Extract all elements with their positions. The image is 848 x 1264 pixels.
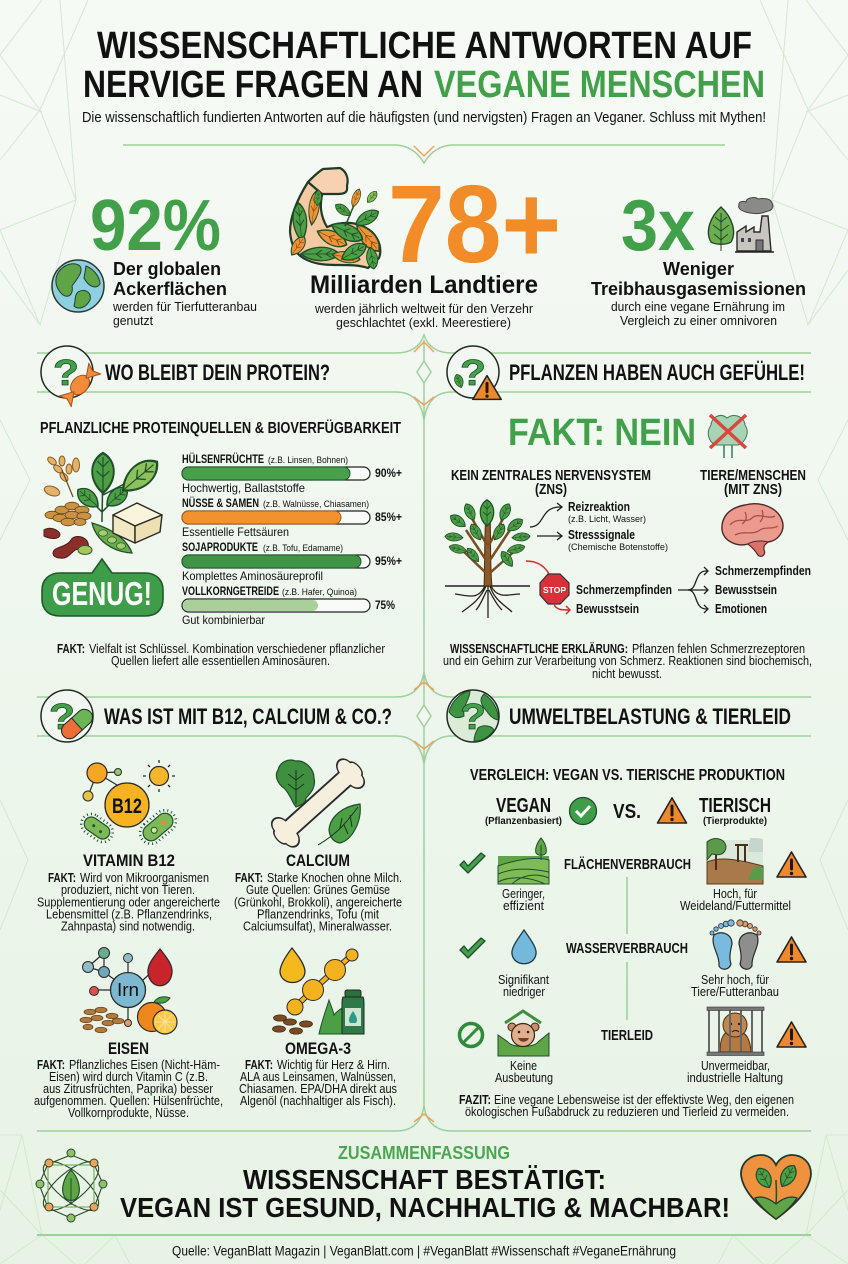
stat: 3x: Vergleich zu einer omnivoren xyxy=(620,313,777,328)
text: fakt protein: FAKT: xyxy=(57,642,85,656)
icon: iron molecule: Irn xyxy=(117,980,139,1000)
headline: VEGAN IST GESUND, NACHHALTIG & MACHBAR! xyxy=(120,1192,730,1223)
comparison header: (Pflanzenbasiert) xyxy=(485,815,562,827)
icon: question mark with candy protein xyxy=(41,346,101,407)
stat: 78+ xyxy=(287,163,561,330)
comparison header: (Tierprodukte) xyxy=(703,815,767,827)
bar: sojaprodukte: 95%+ xyxy=(375,556,402,568)
bar: nuesse und samen: (z.B. Walnüsse, Chiasamen) xyxy=(263,499,369,510)
card: eisen: EISEN xyxy=(108,1039,149,1058)
text: fakt omega: Chiasamen. EPA/DHA direkt aus xyxy=(239,1082,397,1096)
heading: WO BLEIBT DEIN PROTEIN? xyxy=(105,360,330,385)
text: fakt b12: Wird von Mikroorganismen xyxy=(80,871,209,885)
arrows: plant reactions xyxy=(530,503,562,540)
text: fakt eisen: Eisen) wird durch Vitamin C (z.B. xyxy=(49,1070,208,1084)
bar: vollkorngetreide: VOLLKORNGETREIDE xyxy=(182,586,279,598)
icon: no sign xyxy=(460,1024,482,1046)
card: vitamin b12: VITAMIN B12 xyxy=(83,851,175,870)
bar: vollkorngetreide: 75% xyxy=(375,600,395,612)
row: tierleid xyxy=(460,1007,806,1056)
subheading: VERGLEICH: VEGAN VS. TIERISCHE PRODUKTION xyxy=(470,767,785,784)
fakt headline: FAKT: NEIN xyxy=(508,412,696,454)
text: fakt omega: FAKT: xyxy=(245,1058,273,1072)
bar: sojaprodukte: Komplettes Aminosäureprofil xyxy=(182,569,323,583)
card: omega-3 xyxy=(239,948,397,1108)
text: tierleid values: Unvermeidbar, xyxy=(701,1059,770,1073)
text: wissenschaftliche erklaerung: Pflanzen fehlen Schmerzrezeptoren xyxy=(632,642,805,656)
text: brain functions: Emotionen xyxy=(715,602,767,616)
icon: question mark with candy protein: ? xyxy=(53,352,79,393)
panel: zusammenfassung xyxy=(36,1143,811,1223)
text: fakt omega: Wichtig für Herz & Hirn. xyxy=(277,1058,390,1072)
text: fakt b12: Zahnpasta) sind notwendig. xyxy=(61,920,195,934)
text: fakt b12: produziert, nicht von Tieren. xyxy=(61,883,195,897)
text: tierleid values: Keine xyxy=(510,1059,537,1073)
card: eisen xyxy=(34,948,223,1120)
icon: globe with question mark xyxy=(447,690,499,742)
icon: question mark with capsule: ? xyxy=(49,696,75,737)
comparison header: VS. xyxy=(613,801,641,823)
text: fakt b12: Lebensmittel (z.B. Pflanzendrinks, xyxy=(46,908,212,922)
heading: kein zns: KEIN ZENTRALES NERVENSYSTEM xyxy=(451,468,651,484)
text: fakt protein xyxy=(57,642,385,668)
text: wasser values: Tiere/Futteranbau xyxy=(691,985,779,999)
title: NERVIGE FRAGEN AN xyxy=(83,64,423,106)
icon: factory with smoke xyxy=(735,198,774,252)
text: fakt calcium: Starke Knochen ohne Milch. xyxy=(267,871,402,885)
bar: vollkorngetreide xyxy=(182,586,395,627)
title: WISSENSCHAFTLICHE ANTWORTEN AUF xyxy=(97,25,752,67)
title xyxy=(83,25,765,106)
bar: vollkorngetreide: Gut kombinierbar xyxy=(182,613,265,627)
subheading: PFLANZLICHE PROTEINQUELLEN & BIOVERFÜGBARKEIT xyxy=(40,420,401,437)
text: flaechen values: effizient xyxy=(503,899,544,913)
icon: green fields xyxy=(498,838,549,884)
stat: 92%: Der globalen xyxy=(113,258,221,279)
text: plant reactions: Stresssignale xyxy=(568,528,635,542)
headline xyxy=(120,1164,730,1223)
text: wissenschaftliche erklaerung xyxy=(443,641,812,681)
text: fakt calcium: FAKT: xyxy=(235,871,263,885)
text: wasser values xyxy=(498,973,779,999)
row: flaechenverbrauch xyxy=(460,838,806,884)
text: wasser values: niedriger xyxy=(503,985,545,999)
text: flaechen values: Weideland/Futtermittel xyxy=(680,899,791,913)
text: fakt b12: FAKT: xyxy=(48,871,76,885)
callout: genug: GENUG! xyxy=(52,575,152,612)
text: fakt b12: Supplementierung oder angereicherte xyxy=(37,896,220,910)
stat: 92%: werden für Tierfutteranbau xyxy=(112,299,257,314)
text: plant reactions xyxy=(568,500,668,553)
text: wissenschaftliche erklaerung: nicht bewusst. xyxy=(592,667,662,681)
text: fazit: FAZIT: xyxy=(459,1093,491,1107)
card: omega-3: OMEGA-3 xyxy=(285,1039,351,1058)
stat: 78+: 78+ xyxy=(388,163,561,286)
icon: happy bear xyxy=(498,1011,549,1056)
panel: b12 calcium xyxy=(34,690,402,1120)
stat: 92%: Ackerflächen xyxy=(113,278,227,299)
headline: WISSENSCHAFT BESTÄTIGT: xyxy=(243,1164,606,1195)
icon: crossed-out brain xyxy=(708,415,747,458)
icon: bone with leaves xyxy=(266,753,370,853)
text: fazit xyxy=(459,1093,794,1119)
comparison header: TIERISCH xyxy=(699,795,771,817)
text: plant reactions: Reizreaktion xyxy=(568,500,630,514)
text: flaechen values: Geringer, xyxy=(502,887,545,901)
icon: globe xyxy=(52,260,104,312)
icon: science network with leaf xyxy=(36,1149,107,1222)
bar: sojaprodukte: SOJAPRODUKTE xyxy=(182,542,258,554)
panel: pflanzen gefuehle xyxy=(443,346,812,681)
icon: stop sign: STOP xyxy=(543,585,566,595)
bar: huelsenfruechte xyxy=(182,453,402,495)
row: wasserverbrauch xyxy=(460,920,806,969)
text: wasser values: Signifikant xyxy=(498,973,549,987)
text: fakt omega xyxy=(239,1058,397,1108)
text: fakt b12 xyxy=(37,871,220,934)
stat: 78+: geschlachtet (exkl. Meerestiere) xyxy=(336,315,511,330)
row: flaechenverbrauch: FLÄCHENVERBRAUCH xyxy=(564,856,691,873)
stat: 92% xyxy=(52,186,257,328)
icon: question mark with warning xyxy=(447,346,501,399)
row: wasserverbrauch: WASSERVERBRAUCH xyxy=(566,941,688,957)
text: fakt eisen: aufgenommen. Quellen: Hülsenfrüchte, xyxy=(34,1094,223,1108)
heading: tiere menschen: (MIT ZNS) xyxy=(724,482,782,498)
text: fakt omega: Algenöl (nachhaltiger als Fisch). xyxy=(240,1094,396,1108)
card: calcium: CALCIUM xyxy=(286,851,350,870)
text: fakt eisen: aus Zitrusfrüchten, Paprika) besser xyxy=(43,1082,213,1096)
text: tierleid values xyxy=(495,1059,783,1085)
icon: iron molecule xyxy=(80,948,177,1034)
icon: oil drop, chain, bottle xyxy=(272,948,364,1034)
text: fakt calcium: Calciumsulfat), Mineralwasser. xyxy=(243,920,392,934)
panel: umweltbelastung xyxy=(447,690,806,1119)
bar: vollkorngetreide: (z.B. Hafer, Quinoa) xyxy=(282,587,357,598)
heading: WAS IST MIT B12, CALCIUM & CO.? xyxy=(104,704,392,729)
label: ZUSAMMENFASSUNG xyxy=(338,1143,510,1163)
bar: nuesse und samen: 85%+ xyxy=(375,512,402,524)
icon: heart with sprout xyxy=(741,1155,811,1219)
icon: deforestation xyxy=(707,838,763,884)
heading: kein zns: (ZNS) xyxy=(535,482,567,498)
text: no pain xyxy=(576,583,672,616)
bar: huelsenfruechte: HÜLSENFRÜCHTE xyxy=(182,453,264,466)
icon: footprints xyxy=(710,920,761,969)
icon: stop sign xyxy=(526,561,570,614)
icon: leafy muscle arm xyxy=(287,168,384,270)
bar chart xyxy=(182,453,402,627)
text: fakt protein: Vielfalt ist Schlüssel. Kombination verschiedener pflanzlicher xyxy=(89,642,385,656)
card: calcium xyxy=(234,753,402,934)
bar: nuesse und samen: Essentielle Fettsäuren xyxy=(182,525,289,539)
bar: nuesse und samen: NÜSSE & SAMEN xyxy=(182,497,259,510)
stat: 78+: Milliarden Landtiere xyxy=(310,271,538,299)
text: fakt calcium: Gute Quellen: Grünes Gemüse xyxy=(246,883,390,897)
heading: tiere menschen: TIERE/MENSCHEN xyxy=(700,468,806,484)
stat: 3x: 3x xyxy=(621,186,695,266)
text: plant reactions: (Chemische Botenstoffe) xyxy=(568,542,668,553)
panel: protein xyxy=(40,346,402,668)
icon: globe with question mark: ? xyxy=(460,696,486,737)
icon: water drop xyxy=(512,930,536,964)
callout: genug xyxy=(42,559,163,616)
bar: sojaprodukte: (z.B. Tofu, Edamame) xyxy=(263,543,343,554)
stat: 3x: Weniger xyxy=(663,258,734,279)
orange chevrons xyxy=(414,146,434,1122)
text: flaechen values: Hoch, für xyxy=(713,887,757,901)
text: no pain: Bewusstsein xyxy=(576,602,639,616)
heading: kein zns xyxy=(451,468,651,498)
text: tierleid values: Ausbeutung xyxy=(495,1071,553,1085)
text: wasser values: Sehr hoch, für xyxy=(701,973,769,987)
divider lines xyxy=(626,877,628,1020)
text: fakt eisen: Vollkornprodukte, Nüsse. xyxy=(68,1106,189,1120)
text: fakt eisen: FAKT: xyxy=(37,1058,65,1072)
stat: 3x xyxy=(591,186,806,328)
icon: question mark with capsule xyxy=(41,690,96,742)
text: fakt calcium xyxy=(234,871,402,934)
arrows: brain functions xyxy=(678,567,708,613)
text: fakt protein: Quellen liefert alle essentiellen Aminosäuren. xyxy=(111,654,330,668)
bar: huelsenfruechte: 90%+ xyxy=(375,468,402,480)
bar: huelsenfruechte: Hochwertig, Ballaststoffe xyxy=(182,481,305,495)
icon: check circle xyxy=(570,798,596,824)
source line: Quelle: VeganBlatt Magazin | VeganBlatt.com | #VeganBlatt #Wissenschaft #VeganeErnährung xyxy=(172,1244,676,1258)
text: plant reactions: (z.B. Licht, Wasser) xyxy=(568,514,646,525)
title: VEGANE MENSCHEN xyxy=(434,64,765,106)
bar: huelsenfruechte: (z.B. Linsen, Bohnen) xyxy=(268,455,348,466)
text: fazit: ökologischen Fußabdruck zu reduzieren und Tierleid zu vermeiden. xyxy=(465,1105,789,1119)
stat: 3x: durch eine vegane Ernährung im xyxy=(611,299,785,314)
text: brain functions: Bewusstsein xyxy=(715,583,777,597)
text: fakt omega: ALA aus Leinsamen, Walnüssen, xyxy=(240,1070,396,1084)
card: vitamin b12 xyxy=(37,760,220,934)
bar: nuesse und samen xyxy=(182,497,402,539)
text: fazit: Eine vegane Lebensweise ist der effektivste Weg, den eigenen xyxy=(494,1093,794,1107)
stat: 3x: Treibhausgasemissionen xyxy=(591,278,806,299)
text: flaechen values xyxy=(502,887,791,913)
stat: 78+: werden jährlich weltweit für den Verzehr xyxy=(314,301,534,316)
text: fakt eisen: Pflanzliches Eisen (Nicht-Häm- xyxy=(69,1058,220,1072)
icon: tree xyxy=(445,500,530,618)
text: fakt calcium: Pflanzendrinks, Tofu (mit xyxy=(257,908,379,922)
stat: 92%: 92% xyxy=(90,186,221,266)
heading: tiere menschen xyxy=(700,468,806,498)
icon: question mark with warning: ? xyxy=(460,352,486,393)
text: no pain: Schmerzempfinden xyxy=(576,583,672,597)
subtitle: Die wissenschaftlich fundierten Antworten auf die häufigsten (und nervigsten) Fragen an Veganer. Schluss mit Mythen! xyxy=(82,110,766,126)
icon: caged animal xyxy=(707,1007,764,1056)
text: fakt calcium: (Grünkohl, Brokkoli), angereicherte xyxy=(234,896,402,910)
text: tierleid values: industrielle Haltung xyxy=(687,1071,783,1085)
icon: b12 molecule xyxy=(77,760,180,848)
text: wissenschaftliche erklaerung: WISSENSCHAFTLICHE ERKLÄRUNG: xyxy=(450,641,628,656)
comparison header xyxy=(485,795,771,827)
text: brain functions: Schmerzempfinden xyxy=(715,564,811,578)
icon: leaf xyxy=(708,207,734,251)
stat: 92%: genutzt xyxy=(113,313,153,328)
text: fakt eisen xyxy=(34,1058,223,1120)
comparison header: VEGAN xyxy=(496,795,551,817)
text: brain functions xyxy=(715,564,811,616)
bar: sojaprodukte xyxy=(182,542,402,583)
icon: plant protein sources xyxy=(43,453,164,558)
frame lines xyxy=(37,145,811,1235)
row: tierleid: TIERLEID xyxy=(601,1028,653,1044)
icon: brain xyxy=(722,504,783,556)
icon: b12 molecule: B12 xyxy=(112,795,142,818)
